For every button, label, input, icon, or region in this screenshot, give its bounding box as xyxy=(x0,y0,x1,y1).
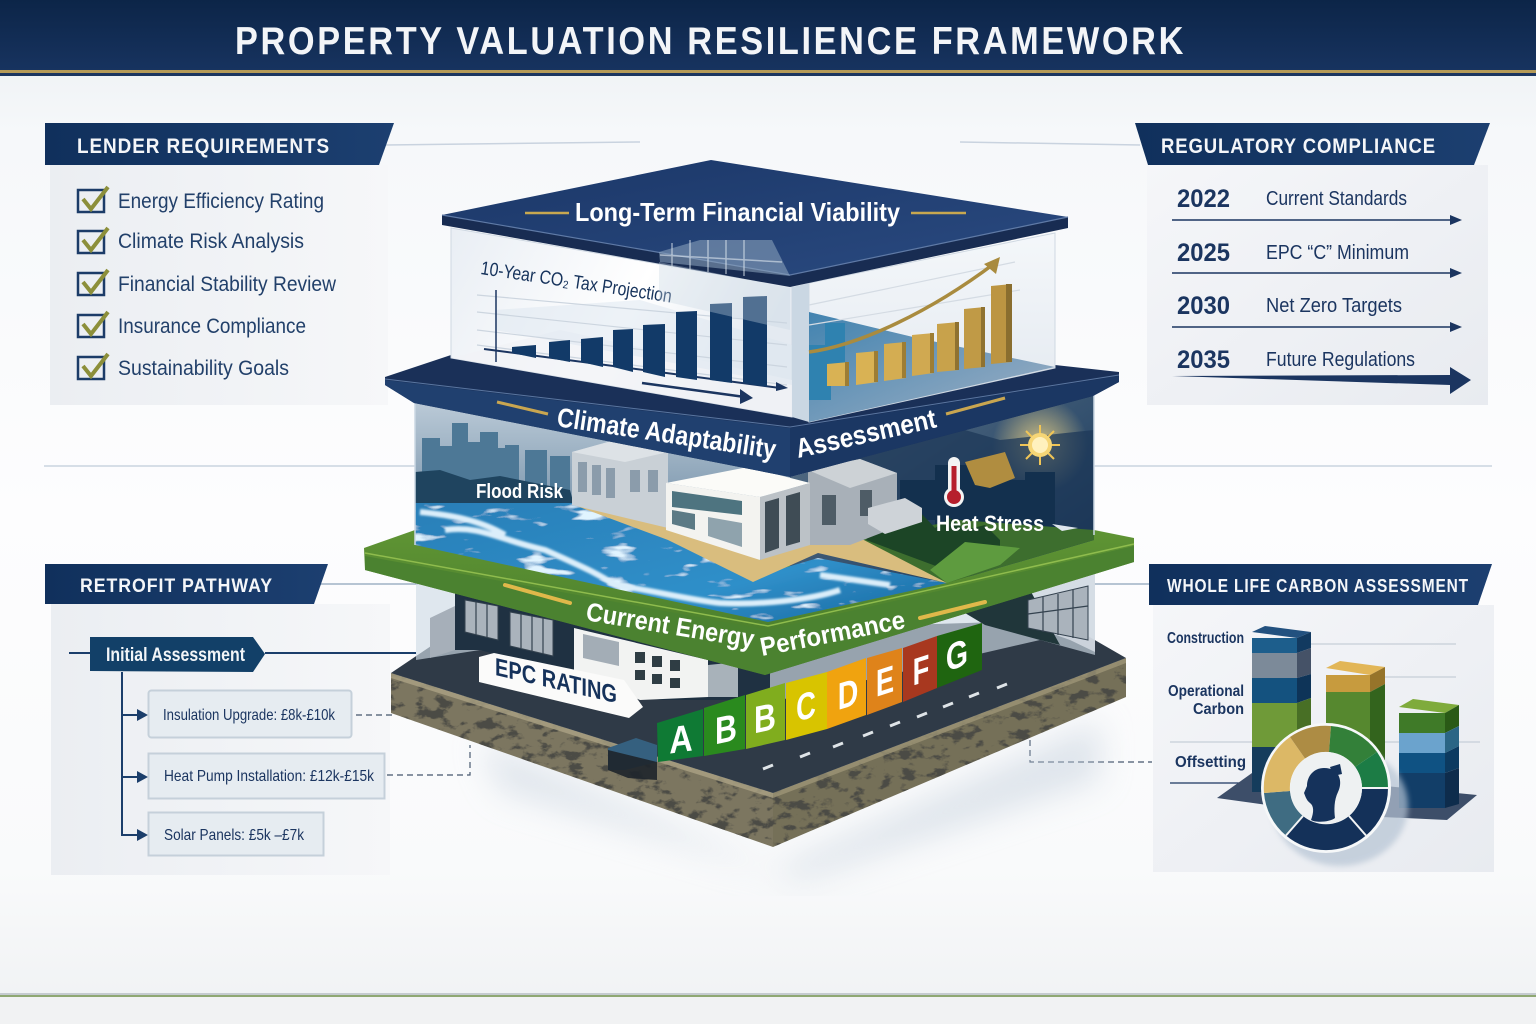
checklist: Climate Risk Analysis xyxy=(118,230,304,253)
step: solar panels xyxy=(148,812,324,856)
chart platform xyxy=(1217,773,1477,820)
sky right xyxy=(790,395,1094,600)
timeline: Future Regulations xyxy=(1266,349,1415,371)
band letters xyxy=(669,631,968,762)
heading: retrofit pathway: RETROFIT PATHWAY xyxy=(80,576,273,597)
carbon labels: Offsetting xyxy=(1175,754,1246,771)
layered building model xyxy=(364,160,1134,847)
lower windows xyxy=(465,586,1088,656)
road dashes xyxy=(763,684,1007,769)
EPC rating label: EPC RATING xyxy=(495,653,617,709)
main white building xyxy=(666,467,810,560)
gold accents xyxy=(505,585,570,603)
timeline: Current Standards xyxy=(1266,188,1407,210)
right glass wall xyxy=(809,233,1055,422)
title: PROPERTY VALUATION RESILIENCE FRAMEWORK xyxy=(235,20,1186,63)
tier 1: navy roof xyxy=(442,160,1068,330)
checklist: Insurance Compliance xyxy=(118,315,306,338)
band letters: A xyxy=(669,716,693,762)
heading: lender requirements xyxy=(45,123,394,165)
tier 3: lower glass storey xyxy=(416,573,1095,700)
band letters: D xyxy=(838,671,858,719)
chart: CO2 tax projection xyxy=(477,258,788,404)
tier 3: green slab xyxy=(364,530,1134,675)
base: soil block xyxy=(391,658,1126,847)
label: climate adaptability assessment: Assessment xyxy=(793,404,939,464)
panel: retrofit pathway xyxy=(45,564,416,875)
timeline: 2025 xyxy=(1177,239,1230,267)
label: current energy performance: Performance xyxy=(757,604,907,662)
icon: sun xyxy=(1020,425,1060,465)
label: long-term financial viability: Long-Term Financial Viability xyxy=(575,197,900,227)
timeline: 2022 xyxy=(1177,185,1230,213)
carbon bar 2 xyxy=(1326,661,1385,767)
building right xyxy=(808,459,922,545)
dashed connectors xyxy=(356,715,1152,775)
band letters: B xyxy=(754,696,776,742)
grass and trees xyxy=(860,520,1094,583)
tier 1: glass storey xyxy=(451,228,1055,422)
band letters: G xyxy=(946,631,968,680)
checklist: Energy Efficiency Rating xyxy=(118,190,324,213)
carbon labels: Carbon xyxy=(1193,701,1244,718)
band letters: F xyxy=(913,646,929,695)
step: initial assessment xyxy=(90,637,265,672)
title banner xyxy=(0,0,1536,76)
left glass wall xyxy=(451,228,792,417)
glow behind sun xyxy=(996,405,1083,480)
gold accents xyxy=(525,212,966,214)
road notch xyxy=(608,738,657,770)
band letters: E xyxy=(876,657,894,706)
water xyxy=(415,503,946,622)
label: climate adaptability assessment: Climate Adaptability xyxy=(555,402,778,465)
heading: lender requirements: LENDER REQUIREMENTS xyxy=(77,135,330,158)
EPC rating bands xyxy=(657,623,982,762)
carbon bar 1 xyxy=(1252,626,1311,792)
tier 2: navy slab xyxy=(385,355,1119,477)
tier 2: climate scene xyxy=(415,395,1094,640)
label: current energy performance: Current Energy xyxy=(584,596,757,654)
step: insulation upgrade xyxy=(148,690,352,738)
timeline: EPC “C” Minimum xyxy=(1266,242,1409,264)
checklist xyxy=(78,187,337,380)
label: current energy performance xyxy=(584,596,907,662)
sky left xyxy=(416,404,790,498)
panel: whole life carbon assessment xyxy=(1149,564,1494,872)
tier 2: glass edge xyxy=(415,395,1094,545)
trend arrow xyxy=(642,383,745,397)
building back left xyxy=(572,440,668,528)
step: solar panels: Solar Panels: £5k –£7k xyxy=(164,827,305,844)
timeline: 2030 xyxy=(1177,292,1230,320)
ground shadow xyxy=(480,720,1100,880)
white lower building xyxy=(574,628,708,700)
carbon bar 3 xyxy=(1399,699,1459,808)
chart: gold bars xyxy=(809,257,1020,400)
carbon grid lines xyxy=(1170,644,1480,783)
bars xyxy=(512,296,767,387)
panel: lender requirements xyxy=(45,123,394,405)
glass corner xyxy=(792,283,809,422)
icon: head xyxy=(1304,764,1342,822)
growth arrow xyxy=(809,263,995,352)
base: road surface xyxy=(391,620,1126,793)
label: flood risk: Flood Risk xyxy=(476,481,564,503)
checklist: Financial Stability Review xyxy=(118,273,337,296)
heading: retrofit pathway xyxy=(45,564,328,604)
foam veins xyxy=(420,512,890,603)
step: heat pump xyxy=(148,754,384,798)
skyline xyxy=(422,423,570,490)
step: heat pump: Heat Pump Installation: £12k-£15k xyxy=(164,768,375,785)
donut gauge with head icon xyxy=(1261,723,1408,866)
gold blocks xyxy=(965,452,1015,488)
gold accents xyxy=(497,402,548,414)
timeline: Net Zero Targets xyxy=(1266,295,1402,317)
checklist: Sustainability Goals xyxy=(118,357,289,380)
heading: regulatory compliance: REGULATORY COMPLIANCE xyxy=(1161,135,1436,158)
label: climate adaptability assessment xyxy=(555,402,939,465)
band letters: C xyxy=(796,683,816,731)
step: insulation upgrade: Insulation Upgrade: £8k-£10k xyxy=(163,707,336,724)
footer rule xyxy=(0,993,1536,1024)
glass reflection on roof xyxy=(659,240,790,330)
timeline xyxy=(1172,185,1471,394)
step: initial assessment: Initial Assessment xyxy=(106,645,246,666)
heading: whole life carbon: WHOLE LIFE CARBON ASSESSMENT xyxy=(1167,576,1469,596)
label: heat stress xyxy=(937,516,1078,531)
band letters: B xyxy=(715,707,737,753)
carbon labels: Operational xyxy=(1168,683,1244,700)
flow lines xyxy=(69,653,416,835)
panel: regulatory compliance xyxy=(1135,123,1490,405)
carbon labels xyxy=(1167,630,1246,771)
timeline: 2035 xyxy=(1177,346,1230,374)
chart title: 10-Year CO₂ Tax Projection xyxy=(479,258,673,307)
heading: regulatory compliance xyxy=(1135,123,1490,165)
carbon labels: Construction xyxy=(1167,630,1244,647)
sand path xyxy=(574,505,947,583)
label: heat stress: Heat Stress xyxy=(936,511,1044,536)
heading: whole life carbon xyxy=(1149,564,1492,605)
icon: thermometer xyxy=(944,457,964,507)
connector lines xyxy=(44,142,1492,584)
